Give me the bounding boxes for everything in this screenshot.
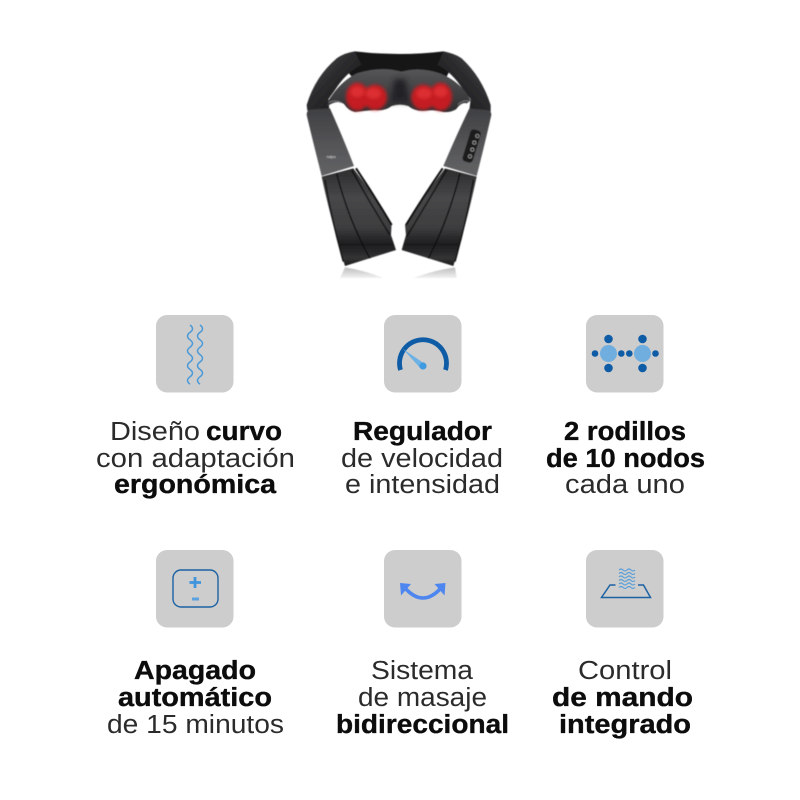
caption: Regulador [353, 418, 492, 446]
caption [341, 418, 503, 499]
caption: de velocidad [341, 445, 503, 473]
right straps [402, 168, 477, 266]
feature: curved design [96, 315, 295, 499]
icon: nodes [586, 315, 664, 392]
caption: bidireccional [336, 711, 509, 739]
caption: Control [578, 657, 672, 685]
right grey band [443, 108, 491, 176]
floor reflection [340, 267, 457, 278]
icon: waves [156, 315, 234, 392]
collar [337, 51, 457, 77]
icon: plus minus panel [156, 550, 234, 628]
icon: two-way curved arrow [384, 550, 462, 628]
feature: bidirectional massage [336, 550, 509, 739]
feature: rollers and nodes [546, 315, 705, 499]
center shadow on mesh [391, 79, 409, 103]
feature: speed regulator [341, 315, 503, 499]
feature: integrated control [552, 550, 693, 739]
inner neck mesh [327, 69, 471, 112]
caption: de masaje [358, 684, 487, 712]
caption: ergonómica [114, 471, 277, 499]
icon: gauge [384, 315, 462, 392]
caption: automático [118, 684, 272, 712]
brand mark: naipo [327, 155, 336, 159]
control panel [462, 129, 482, 163]
feature: auto shut-off [107, 550, 284, 739]
caption: e intensidad [345, 471, 500, 499]
caption: de 15 minutos [107, 711, 284, 739]
left grey band [307, 108, 354, 176]
pale inner edge [329, 101, 470, 105]
right red heated node [411, 83, 452, 111]
caption: de 10 nodos [546, 445, 705, 473]
strap seams [325, 168, 473, 262]
caption: Apagado [134, 657, 256, 685]
left red heated node [346, 83, 387, 111]
caption [546, 418, 705, 499]
caption: con adaptación [96, 445, 295, 473]
caption: de mando [552, 684, 693, 712]
left shoulder pad [307, 52, 362, 111]
caption [107, 657, 284, 739]
caption [552, 657, 693, 739]
icon: tray with waves [586, 550, 664, 628]
product image: neck massager [307, 51, 491, 278]
right shoulder pad [437, 52, 491, 112]
caption: 2 rodillos [564, 418, 686, 446]
caption [336, 657, 509, 739]
left straps [322, 168, 396, 266]
caption: integrado [559, 711, 691, 739]
caption [96, 418, 295, 499]
caption: cada uno [565, 471, 685, 499]
caption: Diseño [110, 418, 200, 446]
caption: Sistema [371, 657, 474, 685]
caption: curvo [206, 418, 282, 446]
